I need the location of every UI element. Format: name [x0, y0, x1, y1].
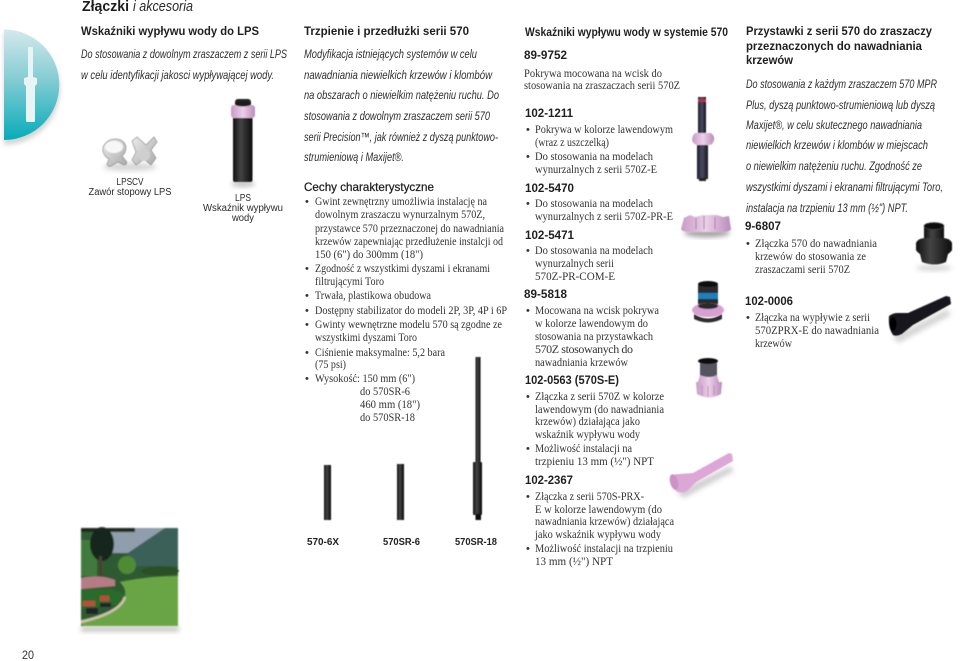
- text block: LPS description: [81, 47, 287, 82]
- item: 102-5470: •: [526, 198, 530, 210]
- heading: risers: Trzpienie i przedłużki serii 570: [304, 24, 469, 38]
- title: [82, 0, 193, 15]
- list: features: •: [305, 290, 309, 302]
- text block: shrub adapters description: instalacja na trzpieniu 13 mm (½") NPT.: [746, 201, 908, 215]
- list: features: Zgodność z wszystkimi dyszami i ekranami: [315, 261, 491, 275]
- list: features: krzewów zapewniając przedłużenie instalcji od: [315, 234, 503, 248]
- item: 102-2367: E w kolorze lawendowym (do: [535, 502, 662, 516]
- item: 89-9752: stosowania na zraszaczach serii 570Z: [524, 78, 680, 92]
- list: features: do 570SR-18: [360, 410, 415, 424]
- list: features: •: [305, 373, 309, 385]
- item: 102-1211: •: [526, 124, 530, 136]
- label: 570SR-6: 570SR-6: [383, 537, 420, 548]
- caption: LPSCV: LPSCV: [116, 177, 144, 188]
- text block: risers description: [304, 47, 499, 164]
- text block: shrub adapters description: [746, 77, 943, 215]
- item: 89-5818: stosowania na przystawkach: [535, 329, 653, 343]
- list: features: 460 mm (18"): [360, 397, 420, 411]
- item: 102-0006: •: [746, 312, 750, 324]
- item: 102-1211: Do stosowania na modelach: [535, 149, 653, 163]
- caption: LPS: LPS: [235, 193, 251, 204]
- caption: LPSCV: [88, 177, 172, 198]
- list: features: wszystkimi dyszami Toro: [315, 330, 417, 344]
- list: features: 150 (6") do 300mm (18"): [315, 247, 423, 261]
- item: 102-0563: wskaźnik wypływu wody: [535, 427, 640, 441]
- list: features: Gwint zewnętrzny umożliwia instalację na: [315, 194, 488, 208]
- item: 89-5818: w kolorze lawendowym do: [535, 316, 648, 330]
- item: 102-2367: 13 mm (½") NPT: [535, 554, 614, 568]
- caption: LPSCV: Zawór stopowy LPS: [88, 187, 172, 198]
- item: 102-0006: 570ZPRX-E do nawadniania: [755, 323, 880, 337]
- text block: risers description: stosowania z dowolnym zraszaczem serii 570: [304, 109, 490, 123]
- icon: blue nozzle with lavender cap: [692, 281, 724, 322]
- list: features: do 570SR-6: [360, 384, 410, 398]
- icon: LPS flow indicator: [231, 99, 255, 187]
- item: 102-2367: •: [526, 491, 530, 503]
- panel: LPS flow indicators: [81, 24, 287, 224]
- item: 89-9752: Pokrywa mocowana na wcisk do: [524, 66, 662, 80]
- item: 9-6807: Złączka 570 do nawadniania: [755, 236, 878, 250]
- list: features: Trwała, plastikowa obudowa: [315, 288, 432, 302]
- item: 102-0563: 102-0563 (570S-E): [525, 373, 619, 387]
- icon: lavender flush tube: [668, 453, 734, 498]
- photo: garden lawn: [81, 527, 179, 632]
- item: 9-6807: 9-6807: [745, 219, 781, 233]
- icon: lavender cap: [681, 215, 731, 238]
- icon: lavender sprinkler body: [692, 97, 714, 181]
- panel: 570 shrub adapters: [745, 24, 952, 350]
- list: features: filtrującymi Toro: [315, 274, 384, 288]
- item: 89-5818: [524, 287, 660, 369]
- text block: risers description: na obszarach o niewielkim natężeniu ruchu. Do: [304, 88, 499, 102]
- item: 102-0006: 102-0006: [745, 294, 793, 308]
- list: features: Gwinty wewnętrzne modelu 570 są zgodne ze: [315, 317, 502, 331]
- icon: teal section tab with sprinkler: [4, 30, 60, 145]
- list: features: przystawce 570 przeznaczonej do nawadniania: [315, 221, 505, 235]
- item: 102-5470: wynurzalnych z serii 570Z-PR-E: [535, 209, 673, 223]
- item: 102-1211: 102-1211: [525, 106, 573, 120]
- item: 102-5471: •: [526, 245, 530, 257]
- item: 102-5471: Do stosowania na modelach: [535, 243, 653, 257]
- icon: black shrub adapter: [916, 222, 952, 271]
- label: 570SR-18: 570SR-18: [455, 537, 497, 548]
- item: 102-0563: lawendowym (do nawadniania: [535, 402, 665, 416]
- item: 89-5818: 89-5818: [524, 287, 567, 301]
- item: 102-1211: (wraz z uszczelką): [535, 135, 609, 149]
- text block: risers description: Modyfikacja istniejących systemów w celu: [304, 47, 477, 61]
- heading: shrub adapters: Przystawki z serii 570 do zraszaczy: [746, 24, 932, 38]
- heading: LPS indicators: Wskaźniki wypływu wody do LPS: [81, 24, 259, 38]
- caption: LPS: [203, 193, 283, 224]
- caption: LPS: Wskaźnik wypływu: [203, 203, 283, 214]
- text block: LPS description: Do stosowania z dowolnym zraszaczem z serii LPS: [81, 47, 287, 61]
- list: features: (75 psi): [315, 357, 346, 371]
- heading: 570 indicators: Wskaźniki wypływu wody w systemie 570: [525, 25, 728, 39]
- item: 102-2367: [525, 473, 675, 568]
- item: 9-6807: krzewów do stosowania ze: [755, 249, 866, 263]
- list: features: •: [305, 263, 309, 275]
- item: 102-1211: •: [526, 151, 530, 163]
- icon: lavender nozzle adapter: [696, 358, 722, 398]
- panel: 570 risers and extensions: [304, 24, 507, 548]
- item: 102-2367: 102-2367: [525, 473, 573, 487]
- text block: risers description: serii Precision™, jak również z dyszą punktowo-: [304, 130, 498, 144]
- item: 102-5471: 570Z-PR-COM-E: [535, 269, 615, 283]
- item: 102-0563: •: [526, 391, 530, 403]
- heading: shrub adapters: [746, 24, 932, 67]
- list: features: •: [305, 347, 309, 359]
- list: features: Ciśnienie maksymalne: 5,2 bara: [315, 345, 446, 359]
- list: features: Wysokość: 150 mm (6"): [315, 371, 415, 385]
- item: 102-0563: trzpieniu 13 mm (½") NPT: [535, 454, 655, 468]
- list: features: •: [305, 305, 309, 317]
- icon: LPSCV check valves: [103, 137, 157, 171]
- list: features: Dostępny stabilizator do modeli 2P, 3P, 4P i 6P: [315, 303, 507, 317]
- item: 9-6807: [745, 219, 878, 276]
- item: 102-1211: wynurzalnych z serii 570Z-E: [535, 162, 657, 176]
- item: 102-0563: Złączka z serii 570Z w kolorze: [535, 389, 664, 403]
- list: features: •: [305, 196, 309, 208]
- item: 102-0563: [525, 373, 665, 468]
- label: 570-6X: 570-6X: [307, 537, 339, 548]
- item: 89-5818: 570Z stosowanych do: [535, 342, 633, 356]
- item: 102-5471: 102-5471: [525, 228, 574, 242]
- item: 102-0006: krzewów: [755, 336, 792, 350]
- item: 102-0563: krzewów) działająca jako: [535, 414, 640, 428]
- text block: LPS description: w celu identyfikacji jakosci wypływającej wody.: [81, 68, 274, 82]
- item: 89-9752: 89-9752: [524, 48, 567, 62]
- item: 102-2367: •: [526, 543, 530, 555]
- item: 9-6807: zraszaczami serii 570Z: [755, 262, 850, 276]
- item: 102-0563: Możliwość instalacji na: [535, 441, 633, 455]
- item: 102-5471: wynurzalnych serii: [535, 256, 615, 270]
- item: 102-2367: jako wskaźnik wypływu wody: [534, 527, 661, 541]
- item: 102-0006: [745, 294, 880, 350]
- caption: LPS: wody: [231, 213, 254, 224]
- item: 102-5470: 102-5470: [525, 181, 574, 195]
- icon: riser 570SR-18: [473, 357, 482, 520]
- item: 9-6807: •: [746, 238, 750, 250]
- icon: riser 570SR-6: [397, 464, 404, 520]
- list: features: •: [305, 319, 309, 331]
- heading: features: Cechy charakterystyczne: [304, 180, 434, 194]
- list: features: dowolnym zraszaczu wynurzalnym 570Z,: [315, 207, 485, 221]
- heading: shrub adapters: przeznaczonych do nawadniania: [746, 39, 922, 53]
- icon: black flush tube: [889, 296, 951, 343]
- text block: risers description: strumieniową i Maxijet®.: [304, 150, 404, 164]
- item: 89-9752: [524, 48, 680, 92]
- item: 102-5470: Do stosowania na modelach: [535, 196, 653, 210]
- item: 102-2367: Złączka z serii 570S-PRX-: [535, 489, 644, 503]
- item: 89-5818: •: [526, 305, 530, 317]
- panel: 570 system flow indicators: [524, 25, 734, 568]
- item: 89-5818: nawadniania krzewów: [535, 355, 628, 369]
- text block: risers description: nawadniania niewielkich krzewów i klombów: [304, 68, 493, 82]
- heading: shrub adapters: krzewów: [746, 53, 794, 67]
- item: 102-1211: [525, 106, 674, 176]
- item: 89-5818: Mocowana na wcisk pokrywa: [535, 303, 660, 317]
- item: 102-1211: Pokrywa w kolorze lawendowym: [535, 122, 674, 136]
- item: 102-0006: Złączka na wypływie z serii: [755, 310, 871, 324]
- item: 102-5470: [525, 181, 673, 223]
- item: 102-5471: [525, 228, 653, 283]
- list: features: [305, 194, 507, 424]
- item: 102-2367: Możliwość instalacji na trzpieniu: [535, 541, 673, 555]
- item: 102-0563: •: [526, 443, 530, 455]
- item: 102-2367: nawadniania krzewów) działająca: [535, 514, 675, 528]
- icon: riser 570-6X: [324, 465, 331, 520]
